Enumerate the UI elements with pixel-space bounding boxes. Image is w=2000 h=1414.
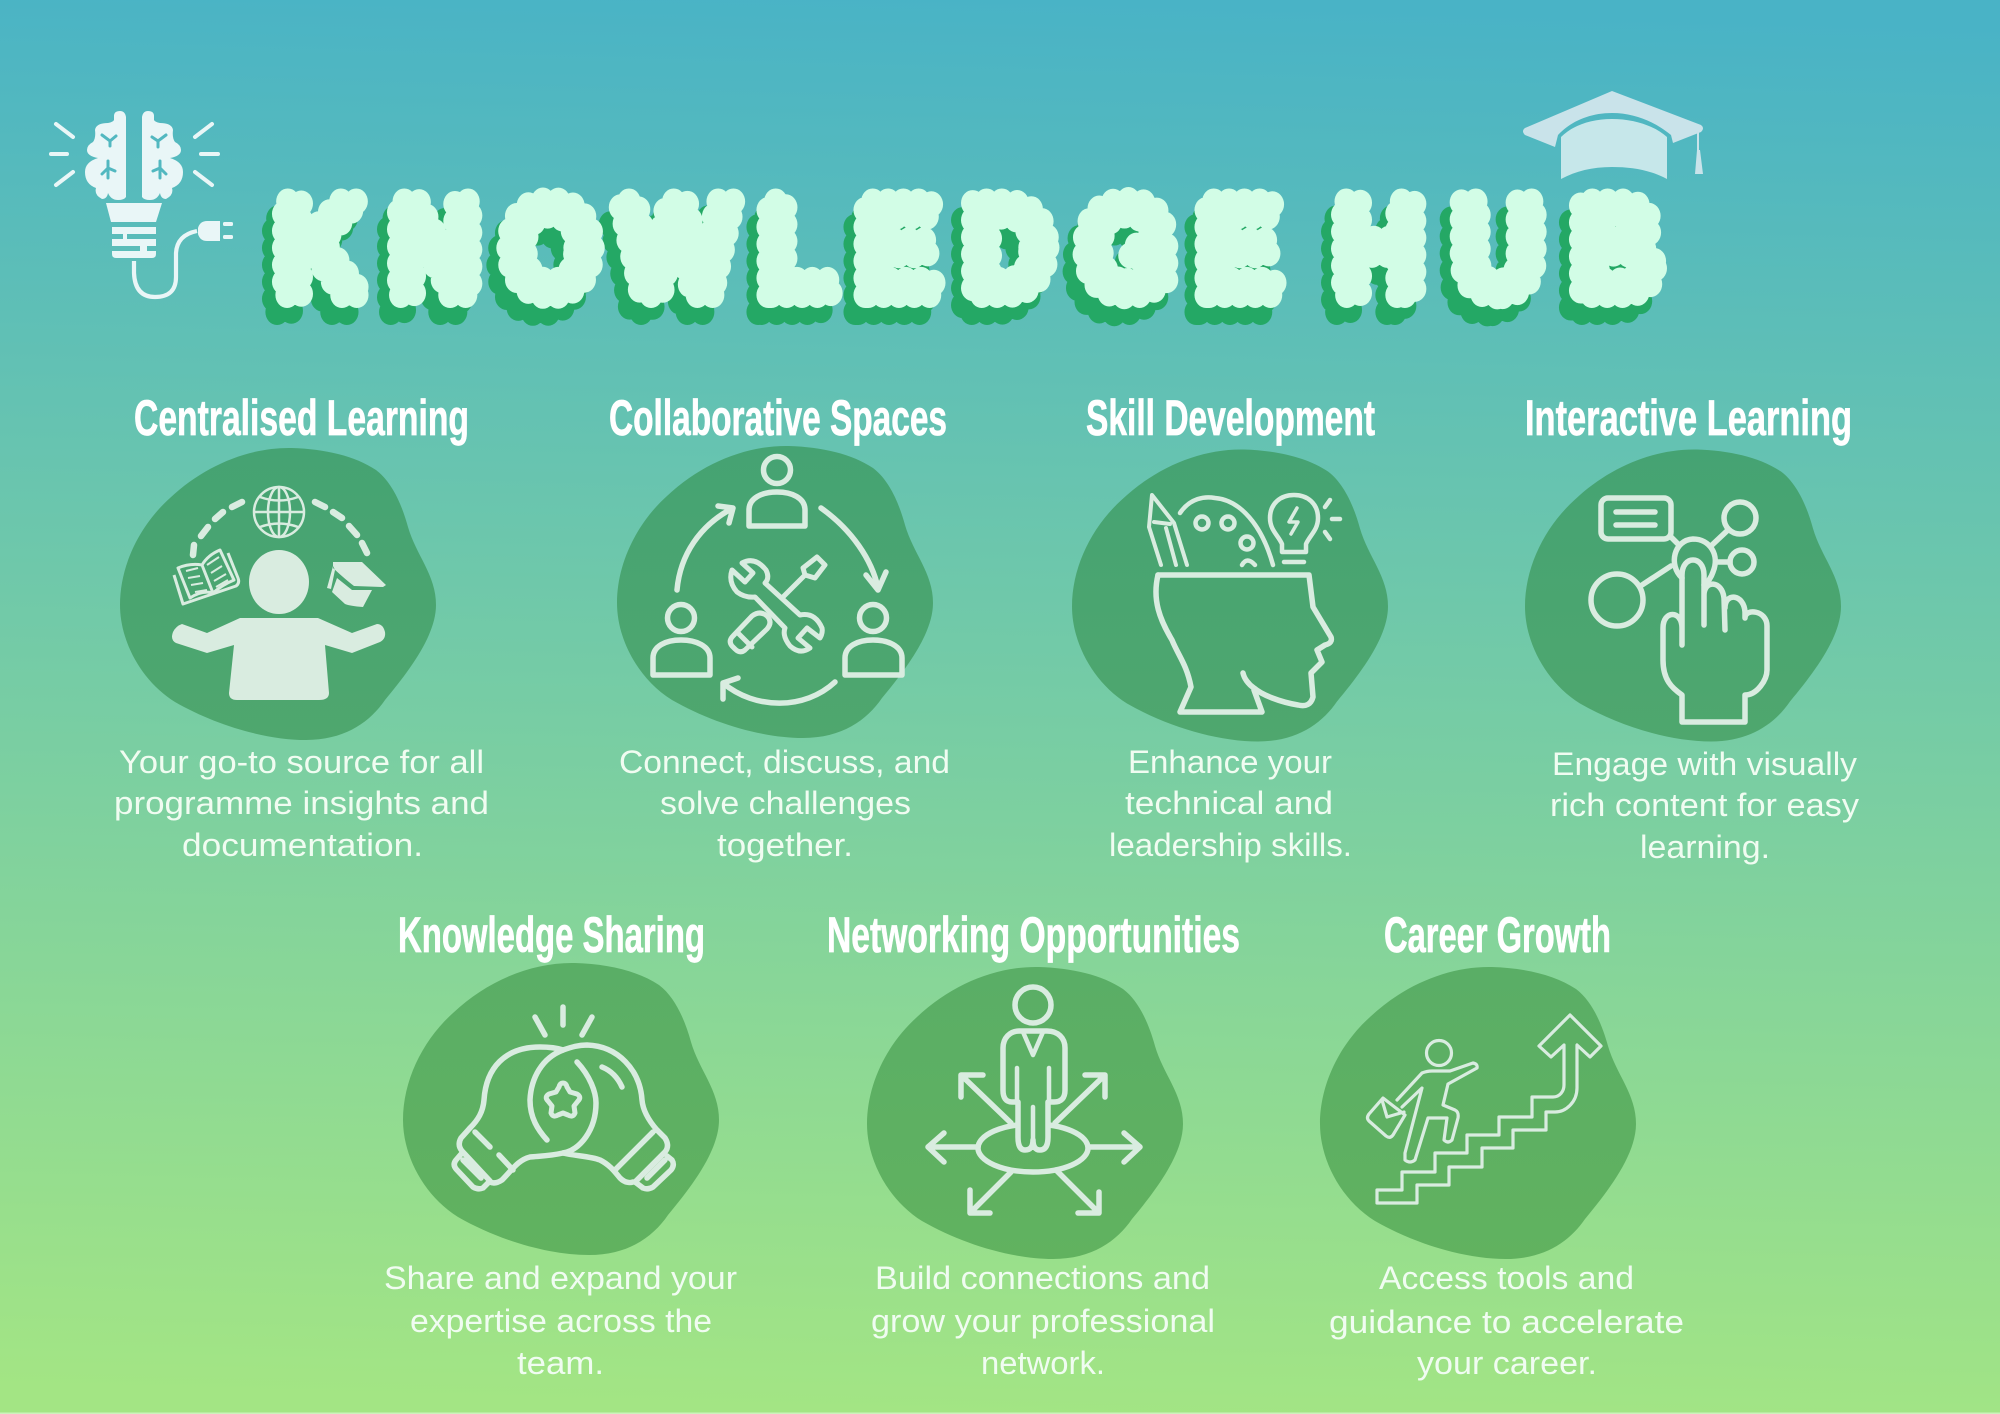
title: KNOWLEDGE HUB: [275, 173, 1661, 324]
description: Enhance your: [1128, 744, 1332, 780]
description: Your go-to source for all: [119, 744, 484, 780]
icon: brain light bulb with plug: [51, 111, 233, 297]
blob background: [1072, 449, 1388, 742]
description: guidance to accelerate: [1329, 1304, 1684, 1340]
description: programme insights and: [114, 785, 489, 821]
description: rich content for easy: [1550, 787, 1859, 823]
panel: networking opportunities: [827, 907, 1240, 1381]
icon: hands holding light bulb: [454, 1007, 673, 1189]
heading: interactive learning: Interactive Learning: [1525, 390, 1852, 446]
description: solve challenges: [660, 785, 911, 821]
panel: knowledge sharing: [384, 907, 737, 1381]
description: [1329, 1260, 1684, 1381]
blob background: [1320, 967, 1636, 1259]
description: technical and: [1125, 785, 1333, 821]
panel: skill development: [1072, 390, 1388, 863]
heading: collaborative spaces: Collaborative Spaces: [609, 390, 947, 446]
description: Access tools and: [1379, 1260, 1634, 1296]
title: KNOWLEDGE HUB: [265, 190, 1651, 341]
description: [619, 744, 950, 863]
description: [1109, 744, 1352, 863]
panel: interactive learning: [1525, 390, 1859, 865]
blob background: [120, 448, 436, 740]
description: documentation.: [182, 827, 423, 863]
icon: person climbing stairs: [1368, 1015, 1601, 1203]
description: [384, 1260, 737, 1381]
description: [871, 1260, 1215, 1381]
panel: collaborative spaces: [609, 390, 950, 863]
blob background: [1525, 449, 1841, 742]
description: [114, 744, 489, 863]
description: your career.: [1417, 1345, 1597, 1381]
heading: career growth: Career Growth: [1384, 907, 1611, 963]
heading: networking opportunities: Networking Opportunities: [827, 907, 1240, 963]
icon: person juggling knowledge: [172, 487, 386, 700]
icon: graduation cap: [1523, 91, 1703, 179]
description: together.: [717, 827, 853, 863]
description: grow your professional: [871, 1303, 1215, 1339]
description: Connect, discuss, and: [619, 744, 950, 780]
description: Build connections and: [875, 1260, 1210, 1296]
description: network.: [981, 1345, 1105, 1381]
description: learning.: [1640, 829, 1770, 865]
blob background: [403, 963, 719, 1255]
description: expertise across the: [410, 1303, 712, 1339]
heading: knowledge sharing: Knowledge Sharing: [398, 907, 705, 963]
panel: career growth: [1320, 907, 1684, 1381]
description: Share and expand your: [384, 1260, 737, 1296]
description: leadership skills.: [1109, 827, 1352, 863]
blob background: [867, 967, 1183, 1259]
blob background: [617, 446, 933, 738]
icon: person with network arrows: [928, 987, 1140, 1213]
icon: team around tools: [653, 456, 902, 703]
panel: centralised learning: [114, 390, 489, 863]
icon: hand touching network: [1591, 498, 1767, 722]
description: [1550, 746, 1859, 865]
description: Engage with visually: [1552, 746, 1857, 782]
icon: head with creative ideas: [1149, 495, 1340, 712]
description: team.: [517, 1345, 604, 1381]
heading: centralised learning: Centralised Learning: [134, 390, 469, 446]
heading: skill development: Skill Development: [1086, 390, 1375, 446]
